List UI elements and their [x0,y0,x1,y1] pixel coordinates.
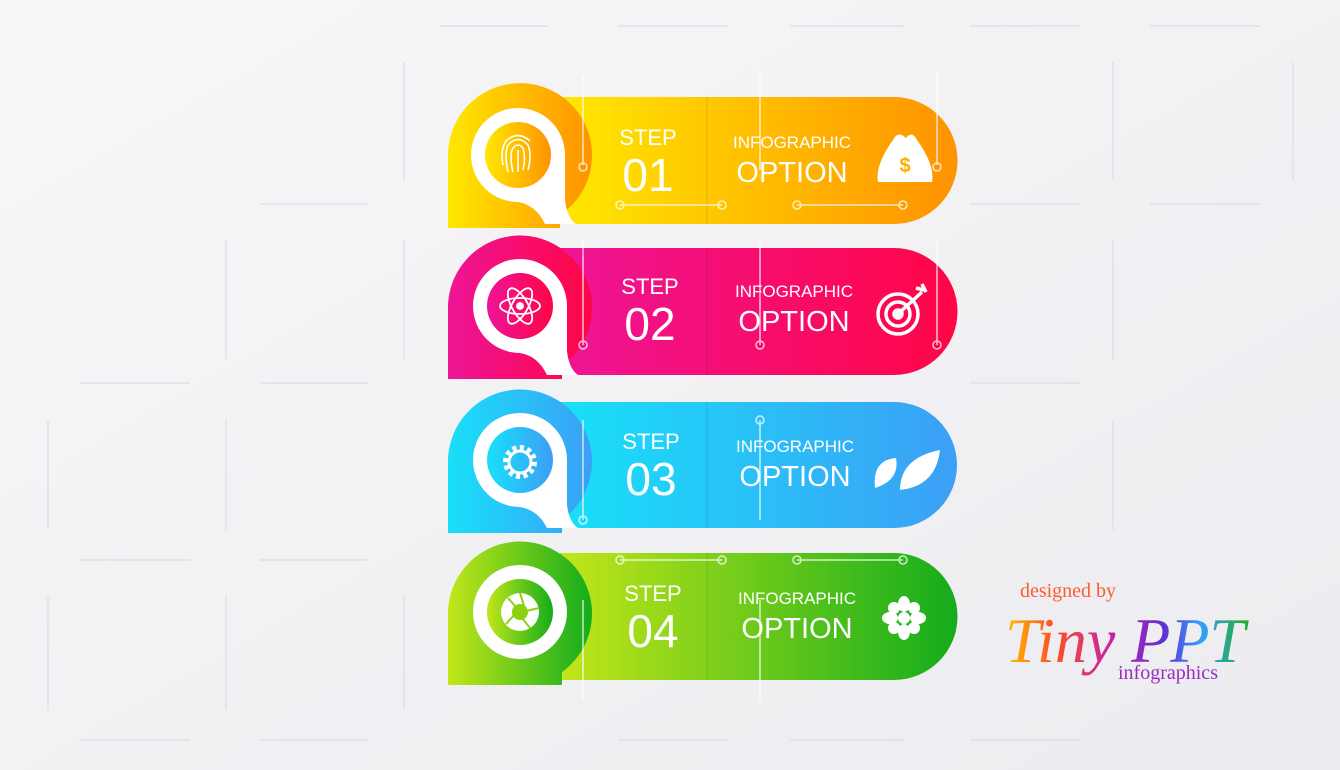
step 1: OPTION [736,157,848,189]
text: option: INFOGRAPHIC [735,282,853,301]
step 4 [448,542,958,685]
logo: designed by TinyPPT [1005,580,1249,684]
icon: atom [500,285,540,327]
pin 1 [448,83,592,228]
text: option: INFOGRAPHIC [738,589,856,608]
icon: gear [506,448,534,476]
bar 4 [560,553,958,680]
bar 2 [560,248,958,375]
pin 2 [448,236,592,379]
logo: designed by TinyPPT: designed by [1020,580,1116,602]
step 1 [448,83,958,228]
pin 3 [448,390,592,533]
step 2 [448,236,958,379]
icon: leaves [875,450,940,490]
step 4: 04 [627,605,679,657]
step 3: OPTION [739,461,851,493]
step 3: 03 [625,453,677,505]
icon: aperture [501,593,539,631]
logo: designed by TinyPPT: infographics [1118,662,1218,684]
text: step 03: STEP [622,429,680,454]
icon: target [878,284,926,334]
logo: designed by TinyPPT: Tiny PPT [1005,605,1249,676]
text: step 01: STEP [619,125,677,150]
text: step 02: STEP [621,274,679,299]
icon: money bag: $ [899,155,911,177]
icon: fingerprint [502,136,530,172]
pin 4 [448,542,592,685]
icon: money bag [878,134,932,182]
bar 3 [560,402,957,528]
text: option: INFOGRAPHIC [736,437,854,456]
step 1: 01 [622,149,674,201]
step 2: OPTION [738,306,850,338]
step 4: OPTION [741,613,853,645]
step 2: 02 [624,298,676,350]
step 3 [448,390,957,533]
icon: flower [882,596,926,640]
text: step 04: STEP [624,581,682,606]
text: option: INFOGRAPHIC [733,133,851,152]
bar 1 [560,97,958,224]
